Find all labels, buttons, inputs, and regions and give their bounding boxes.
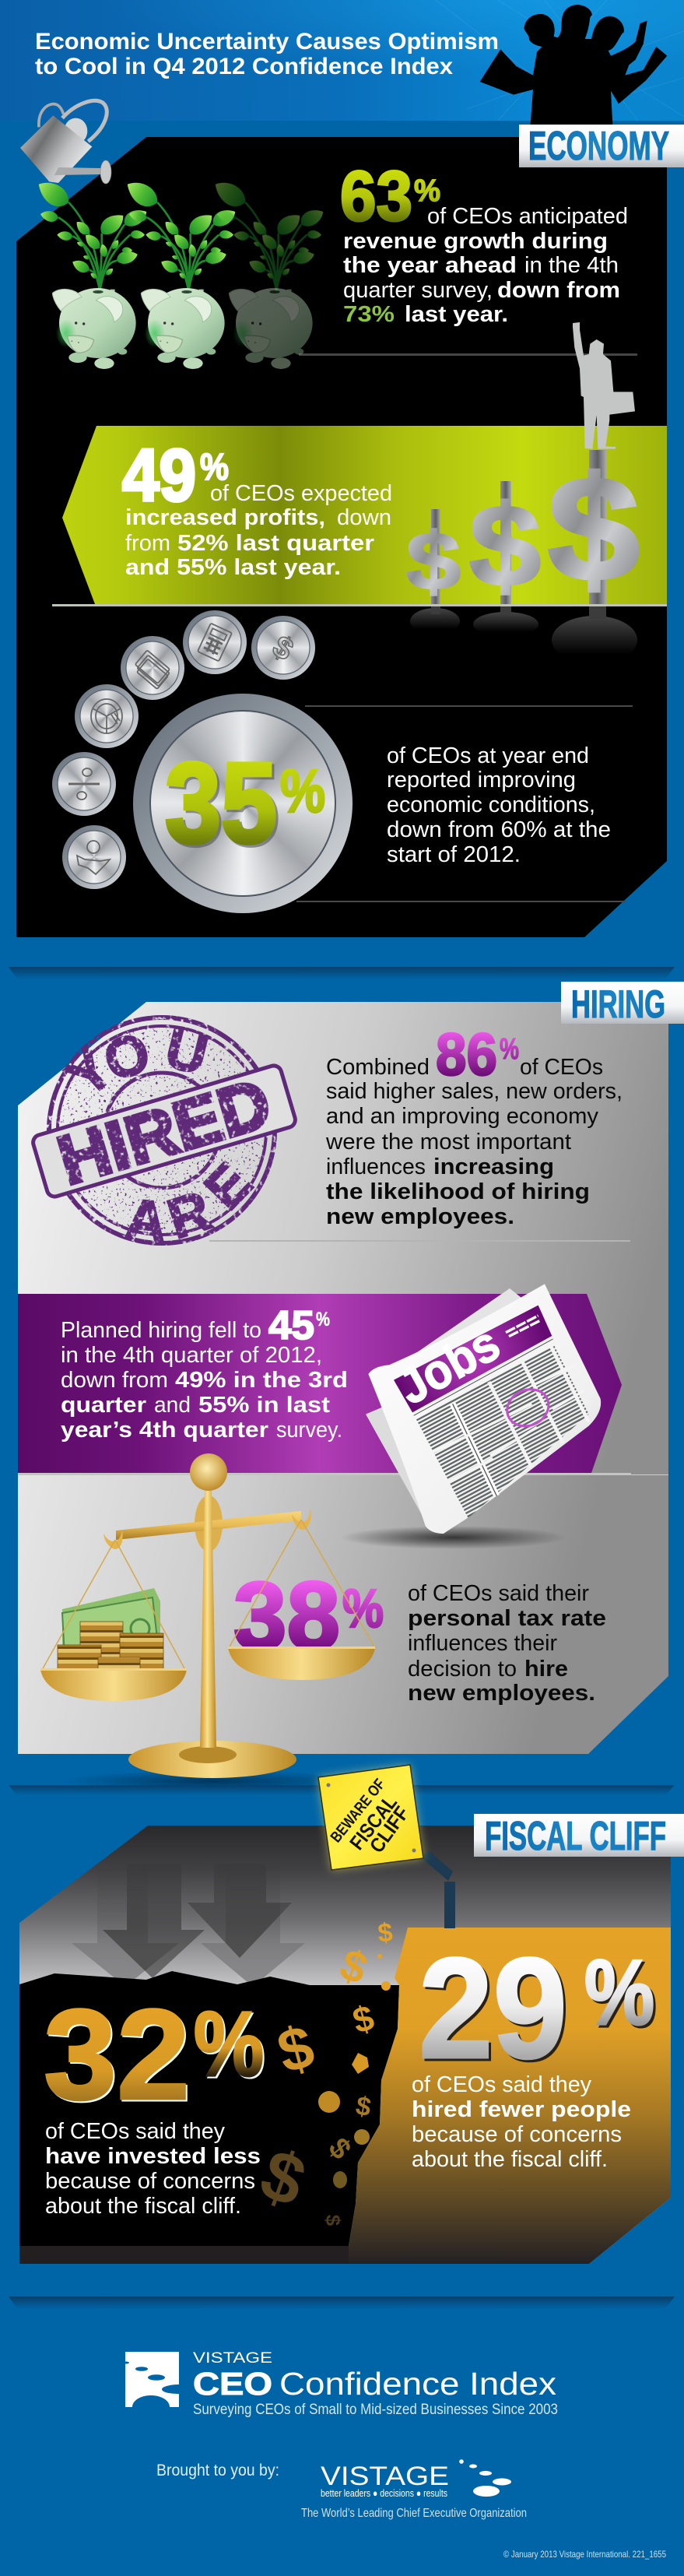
stat: 38 percent: % xyxy=(342,1578,384,1639)
illustration: you are hired stamp: HIRED xyxy=(50,1064,279,1199)
illustration: you are hired stamp: A xyxy=(123,1187,170,1253)
panel: orange cliff xyxy=(349,1928,671,2264)
illustration: rising dollar signs xyxy=(406,447,640,664)
illustration: falling dollars and rocks xyxy=(251,1917,394,2226)
text: personal tax rate: personal tax rate xyxy=(408,1606,606,1631)
text: increased profits: and 55% last year. xyxy=(125,555,341,580)
title: to Cool in Q4 2012 Confidence Index xyxy=(35,54,453,79)
divider: coin text bottom xyxy=(296,901,626,902)
stat: 29 percent: 29 xyxy=(421,1930,570,2090)
icon: coin dollar xyxy=(251,616,315,680)
illustration: falling dollars and rocks: $ xyxy=(321,2132,357,2166)
stat: 32 percent: % xyxy=(195,1994,265,2097)
illustration: falling dollars and rocks: $ xyxy=(353,2091,374,2123)
panel: purple planned hiring band xyxy=(18,1294,622,1473)
text: increased profits: down xyxy=(337,505,391,530)
text: revenue growth: quarter survey, xyxy=(343,278,493,303)
footer: vistage logo xyxy=(301,2459,527,2520)
text: hired fewer xyxy=(412,2072,631,2172)
text: planned hiring: 55% in last xyxy=(198,1393,330,1418)
illustration: falling dollars and rocks: $ xyxy=(349,1997,378,2041)
strip: panel bottom xyxy=(19,2246,349,2264)
section: economy xyxy=(16,100,684,937)
stat: 29 percent: 29 xyxy=(419,1928,567,2088)
stat: 35 percent: 35 xyxy=(167,742,279,870)
illustration: black cliff xyxy=(19,1971,399,2246)
shadow: newspaper xyxy=(341,1526,566,1549)
icon: coin wallet xyxy=(121,636,184,700)
text: planned hiring: year’s 4th quarter xyxy=(61,1418,268,1443)
illustration: watering can xyxy=(20,100,111,184)
text: planned hiring: Planned hiring fell to xyxy=(61,1318,261,1343)
text: planned hiring: 45 xyxy=(268,1303,314,1348)
text: revenue growth: revenue growth during xyxy=(343,229,608,254)
text: planned hiring: 49% in the 3rd xyxy=(175,1368,348,1393)
stat: 63 percent: % xyxy=(414,174,440,208)
stat: 32 percent: % xyxy=(194,1993,264,2096)
stat: 35 percent: % xyxy=(280,757,325,825)
text: hiring influences: were the most important xyxy=(325,1130,571,1154)
illustration: you are hired stamp xyxy=(30,1017,299,1253)
icon: sign post xyxy=(420,1851,455,1928)
icon: coin in hand xyxy=(62,825,126,889)
icon: coin calculator xyxy=(183,610,247,674)
icon: beware of fiscal cliff sign: CLIFF xyxy=(365,1801,414,1857)
text: hiring influences: and an improving economy xyxy=(326,1104,598,1129)
text: planned hiring: % xyxy=(316,1309,330,1330)
text: hired fewer: of CEOs said they xyxy=(412,2072,591,2097)
text: economic conditions: of CEOs at year end xyxy=(387,743,589,768)
text: brought to you by: Brought to you by: xyxy=(156,2462,279,2479)
icon: coin dollar: $ xyxy=(267,629,299,667)
text: hiring influences: said higher sales, new orders, xyxy=(326,1079,623,1104)
icon: coin pie chart xyxy=(75,684,139,748)
text: personal tax rate: influences their xyxy=(408,1631,557,1656)
text: planned hiring: down from xyxy=(61,1368,168,1393)
text: invested less: about the fiscal cliff. xyxy=(45,2194,241,2219)
illustration: jobs newspaper xyxy=(366,1284,601,1534)
text: increased profits: 52% last quarter xyxy=(177,531,374,556)
text: revenue growth: the year ahead xyxy=(343,253,517,278)
illustration: you are hired stamp: U xyxy=(160,1017,214,1087)
footer: CEO confidence index logo xyxy=(123,2350,558,2418)
stat: 32 percent: 32 xyxy=(45,1984,191,2128)
text: personal tax rate: decision to xyxy=(408,1657,517,1682)
text: invested less: have invested less xyxy=(45,2144,261,2169)
icon: beware of fiscal cliff sign xyxy=(318,1765,423,1870)
text: planned hiring: quarter xyxy=(61,1393,146,1418)
text: revenue growth: in the 4th xyxy=(524,253,619,278)
shadow: scale base xyxy=(65,1770,360,1792)
panel: economy xyxy=(16,137,667,937)
illustration: falling dollars and rocks: $ xyxy=(251,2134,315,2223)
illustration: cash and coins in left pan xyxy=(58,1588,163,1670)
text: tagline: Surveying CEOs of Small to Mid-sized Businesses Since 2003 xyxy=(193,2402,558,2418)
text: personal tax rate: new employees. xyxy=(408,1681,595,1706)
text: hiring influences xyxy=(325,1055,623,1229)
illustration: you are hired stamp: E xyxy=(193,1151,264,1221)
text: economic conditions: down from 60% at the xyxy=(387,817,611,842)
section: fiscal cliff xyxy=(19,1765,684,2264)
illustration: large silver coin xyxy=(133,694,353,913)
text: increased profits: of CEOs expected xyxy=(210,481,392,506)
text: increased profits: increased profits, xyxy=(125,505,325,530)
illustration: falling dollars and rocks: $ xyxy=(377,1917,394,1949)
divider: green band xyxy=(52,604,667,606)
text: planned hiring: survey. xyxy=(276,1418,342,1443)
illustration: you are hired stamp: Y xyxy=(55,1038,125,1109)
stat: 63 percent: 63 xyxy=(340,157,412,236)
icon: beware of fiscal cliff sign: BEWARE OF xyxy=(328,1776,389,1846)
text: CEO: CEO xyxy=(193,2366,272,2402)
text: invested less xyxy=(45,2119,261,2219)
stat: 38 percent: 38 xyxy=(233,1563,340,1670)
illustration: rising dollar signs: $ xyxy=(406,517,461,607)
text: hired fewer: hired fewer people xyxy=(412,2097,631,2122)
divider: coin text top xyxy=(305,705,633,707)
icon: businessman on dollar sign xyxy=(573,322,635,449)
icon: coin fraction xyxy=(52,752,116,816)
text: hiring influences: influences xyxy=(326,1154,426,1179)
text: confidence index: Confidence Index xyxy=(279,2366,557,2402)
illustration: falling dollars and rocks: $ xyxy=(334,1939,374,1994)
text: invested less: because of concerns xyxy=(45,2169,255,2194)
text: vistage wordmark: VISTAGE xyxy=(321,2462,449,2491)
text: economic conditions: reported improving xyxy=(387,768,576,792)
illustration: jobs newspaper: Jobs xyxy=(389,1316,509,1415)
illustration: piggy banks with plants xyxy=(33,177,327,369)
header band xyxy=(0,0,684,121)
stat: 49 percent: % xyxy=(200,447,229,488)
text: hiring influences: the likelihood of hiring xyxy=(326,1179,590,1204)
text: planned hiring: and xyxy=(154,1393,191,1418)
text: personal tax rate: of CEOs said their xyxy=(408,1581,589,1606)
panel: fiscal cliff background xyxy=(19,1826,671,2264)
text: better leaders: better leaders ● decisions ● results xyxy=(321,2487,447,2499)
text: invested less: of CEOs said they xyxy=(45,2119,225,2144)
illustration: you are hired stamp: R xyxy=(160,1179,218,1251)
text: revenue growth xyxy=(343,204,628,327)
illustration: you are hired stamp: O xyxy=(96,1021,157,1094)
text: hiring influences: of CEOs xyxy=(520,1055,603,1080)
icon: down arrows xyxy=(72,1864,305,1987)
section: hiring xyxy=(18,982,684,1792)
text: increased profits: from xyxy=(125,531,170,556)
stat: 29 percent: % xyxy=(584,1941,654,2044)
illustration: falling dollars and rocks: $ xyxy=(271,2012,321,2086)
text: hired fewer: because of concerns xyxy=(412,2122,622,2147)
text: vistage: VISTAGE xyxy=(193,2350,272,2367)
illustration: rising dollar signs: $ xyxy=(548,447,640,612)
divider: purple band xyxy=(18,1473,631,1475)
text: economic conditions: start of 2012. xyxy=(387,842,521,867)
text: increased profits xyxy=(125,481,392,580)
text: economic conditions xyxy=(387,743,611,867)
illustration: gold balance scale xyxy=(40,1453,375,1778)
divider: economy top xyxy=(299,353,637,356)
text: hired fewer: about the fiscal cliff. xyxy=(412,2147,608,2172)
text: revenue growth: 73% xyxy=(343,302,395,327)
icon: vistage square mark xyxy=(123,2352,179,2407)
title: Economic Uncertainty Causes Optimism xyxy=(35,29,499,54)
illustration: falling dollars and rocks: $ xyxy=(321,2215,345,2226)
text: personal tax rate xyxy=(408,1581,606,1706)
icon: vistage dots xyxy=(459,2459,511,2497)
stat: 49 percent: 49 xyxy=(122,434,196,517)
text: hiring influences: increasing xyxy=(433,1154,554,1179)
text: hiring influences: new employees. xyxy=(326,1204,514,1229)
stat: 32 percent: 32 xyxy=(44,1983,190,2126)
stat: 29 percent xyxy=(419,1928,657,2090)
text: revenue growth: of CEOs anticipated xyxy=(427,204,628,229)
illustration: rising dollar signs: $ xyxy=(469,482,541,610)
stat: 29 percent: % xyxy=(587,1943,657,2047)
text: economic conditions: economic conditions, xyxy=(387,792,595,817)
panel: green profits band xyxy=(62,426,667,604)
text: revenue growth: last year. xyxy=(405,302,508,327)
title xyxy=(35,29,499,79)
icon: CEO silhouettes xyxy=(480,5,667,125)
divider: hiring text xyxy=(209,1240,630,1242)
stat: 86 percent: % xyxy=(500,1033,519,1066)
stat: 32 percent xyxy=(44,1983,265,2128)
text: hiring influences: Combined xyxy=(326,1055,430,1080)
icon: beware of fiscal cliff sign: FISCAL xyxy=(345,1791,402,1854)
text: revenue growth: down from xyxy=(497,278,620,303)
text: world's leading: The World’s Leading Chief Executive Organization xyxy=(301,2507,527,2520)
text: planned hiring xyxy=(61,1303,348,1443)
panel: hiring xyxy=(18,1002,668,1754)
text: personal tax rate: hire xyxy=(524,1657,568,1682)
text: planned hiring: in the 4th quarter of 2012, xyxy=(61,1343,322,1368)
stat: 86 percent: 86 xyxy=(436,1021,497,1088)
stat: 35 percent: 35 xyxy=(165,740,277,867)
